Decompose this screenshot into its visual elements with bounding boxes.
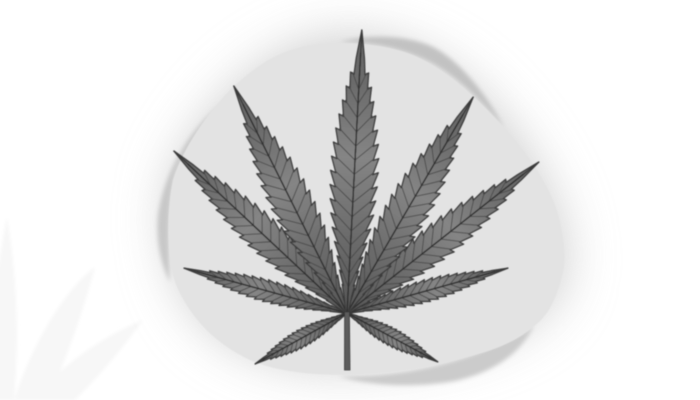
back ring crescents (158, 37, 534, 385)
leaflet: far left (181, 257, 350, 324)
leaflet: lower right (343, 305, 442, 370)
stem (344, 312, 350, 370)
crescent: bottom right (338, 325, 534, 385)
crescent: top right (340, 37, 504, 128)
leaflet: far right (344, 257, 511, 324)
leaflet: mid right (336, 148, 550, 327)
leaflet: upper right (329, 86, 492, 324)
leaflet: centre (323, 29, 386, 314)
leaf (161, 29, 550, 372)
crescent: left (158, 105, 220, 282)
soft shadow glow around blob (167, 36, 566, 368)
ghost leaves: bottom left watermark (0, 217, 143, 400)
leaflet: lower left (251, 305, 351, 372)
leaflet: upper left (215, 77, 366, 323)
leaflet: mid left (161, 138, 359, 326)
blob: light rounded panel (168, 43, 564, 375)
